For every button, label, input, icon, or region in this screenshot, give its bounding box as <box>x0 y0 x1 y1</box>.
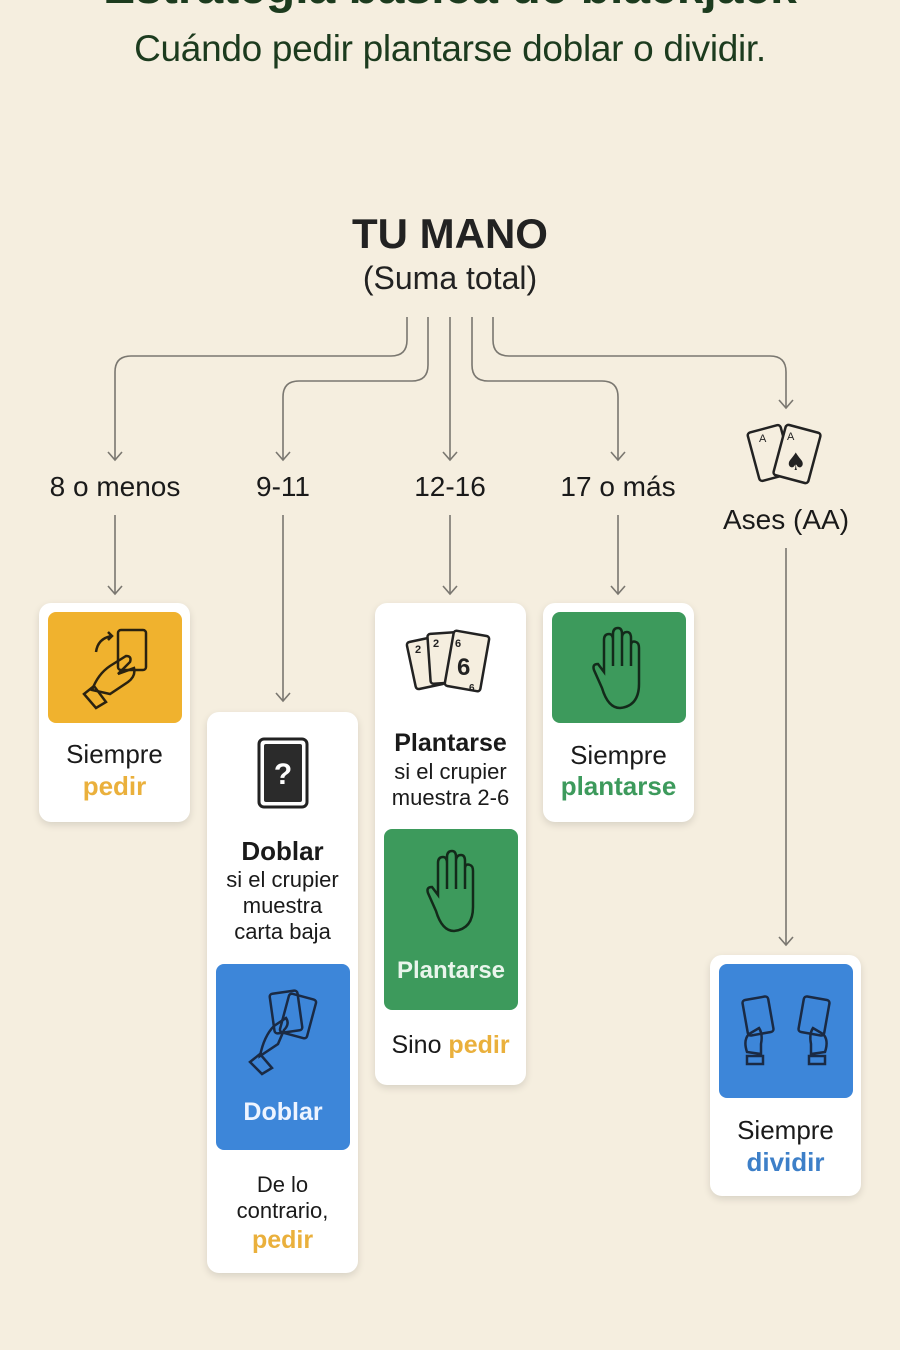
icon: aces: A <box>759 433 767 445</box>
card: 9-11: contrario, <box>237 1198 328 1223</box>
card: ases dividir: Siempre <box>737 1115 834 1145</box>
card: 12-16: si el crupier <box>394 759 507 784</box>
label: 8 o menos: 8 o menos <box>50 471 180 502</box>
icon: cards 2 2 6: 6 <box>469 683 475 694</box>
card: ases dividir: dividir <box>746 1147 824 1177</box>
card: 12-16: Plantarse <box>394 729 507 757</box>
label: 9-11: 9-11 <box>256 471 310 502</box>
box: blue doblar: Doblar <box>243 1098 323 1126</box>
card: 12-16: muestra 2-6 <box>392 785 509 810</box>
card: 17 o mas: plantarse <box>561 771 676 801</box>
card: 8 o menos: Siempre <box>66 739 163 769</box>
icon: cards 2 2 6: 2 <box>415 644 421 656</box>
icon: cards 2 2 6 <box>406 630 490 694</box>
box: green plantarse <box>384 829 518 1010</box>
icon: aces <box>746 424 822 484</box>
heading: tu mano: (Suma total) <box>363 260 537 296</box>
icon: cards 2 2 6: 6 <box>455 638 461 650</box>
card: 9-11: Doblar <box>241 836 324 866</box>
card: 8 o menos <box>39 603 190 822</box>
subtitle: Cuándo pedir plantarse doblar o dividir. <box>134 28 766 69</box>
box: blue split <box>719 964 853 1098</box>
heading: tu mano: TU MANO <box>352 210 548 257</box>
card: 17 o mas: Siempre <box>570 740 667 770</box>
card: 9-11: De lo <box>257 1172 308 1197</box>
card: 8 o menos: pedir <box>83 771 146 801</box>
card: 9-11: si el crupier <box>226 867 339 892</box>
card: 12-16: Sino pedir <box>391 1031 510 1059</box>
card: 9-11: carta baja <box>234 919 331 944</box>
label: 12-16: 12-16 <box>414 471 486 502</box>
heading: tu mano <box>352 210 548 296</box>
label: 17 o más: 17 o más <box>560 471 676 502</box>
icon: aces: ♠ <box>785 448 807 476</box>
card: ases dividir <box>710 955 861 1196</box>
icon: aces: A <box>787 431 795 443</box>
icon: cards 2 2 6: 2 <box>433 638 439 650</box>
box: green hand <box>552 612 686 723</box>
card: 17 o mas <box>543 603 694 822</box>
icon box: yellow hit <box>48 612 182 723</box>
icon: cards 2 2 6: 6 <box>457 654 470 681</box>
icon: question card: ? <box>274 758 292 791</box>
card: 9-11 <box>207 712 358 1273</box>
card: 9-11: muestra <box>243 893 322 918</box>
box: green plantarse: Plantarse <box>397 957 505 984</box>
card: 12-16 <box>375 603 526 1085</box>
icon: question card <box>258 738 308 808</box>
card: 9-11: pedir <box>252 1226 313 1254</box>
label: ases: Ases (AA) <box>723 504 849 535</box>
box: blue doblar <box>216 964 350 1150</box>
